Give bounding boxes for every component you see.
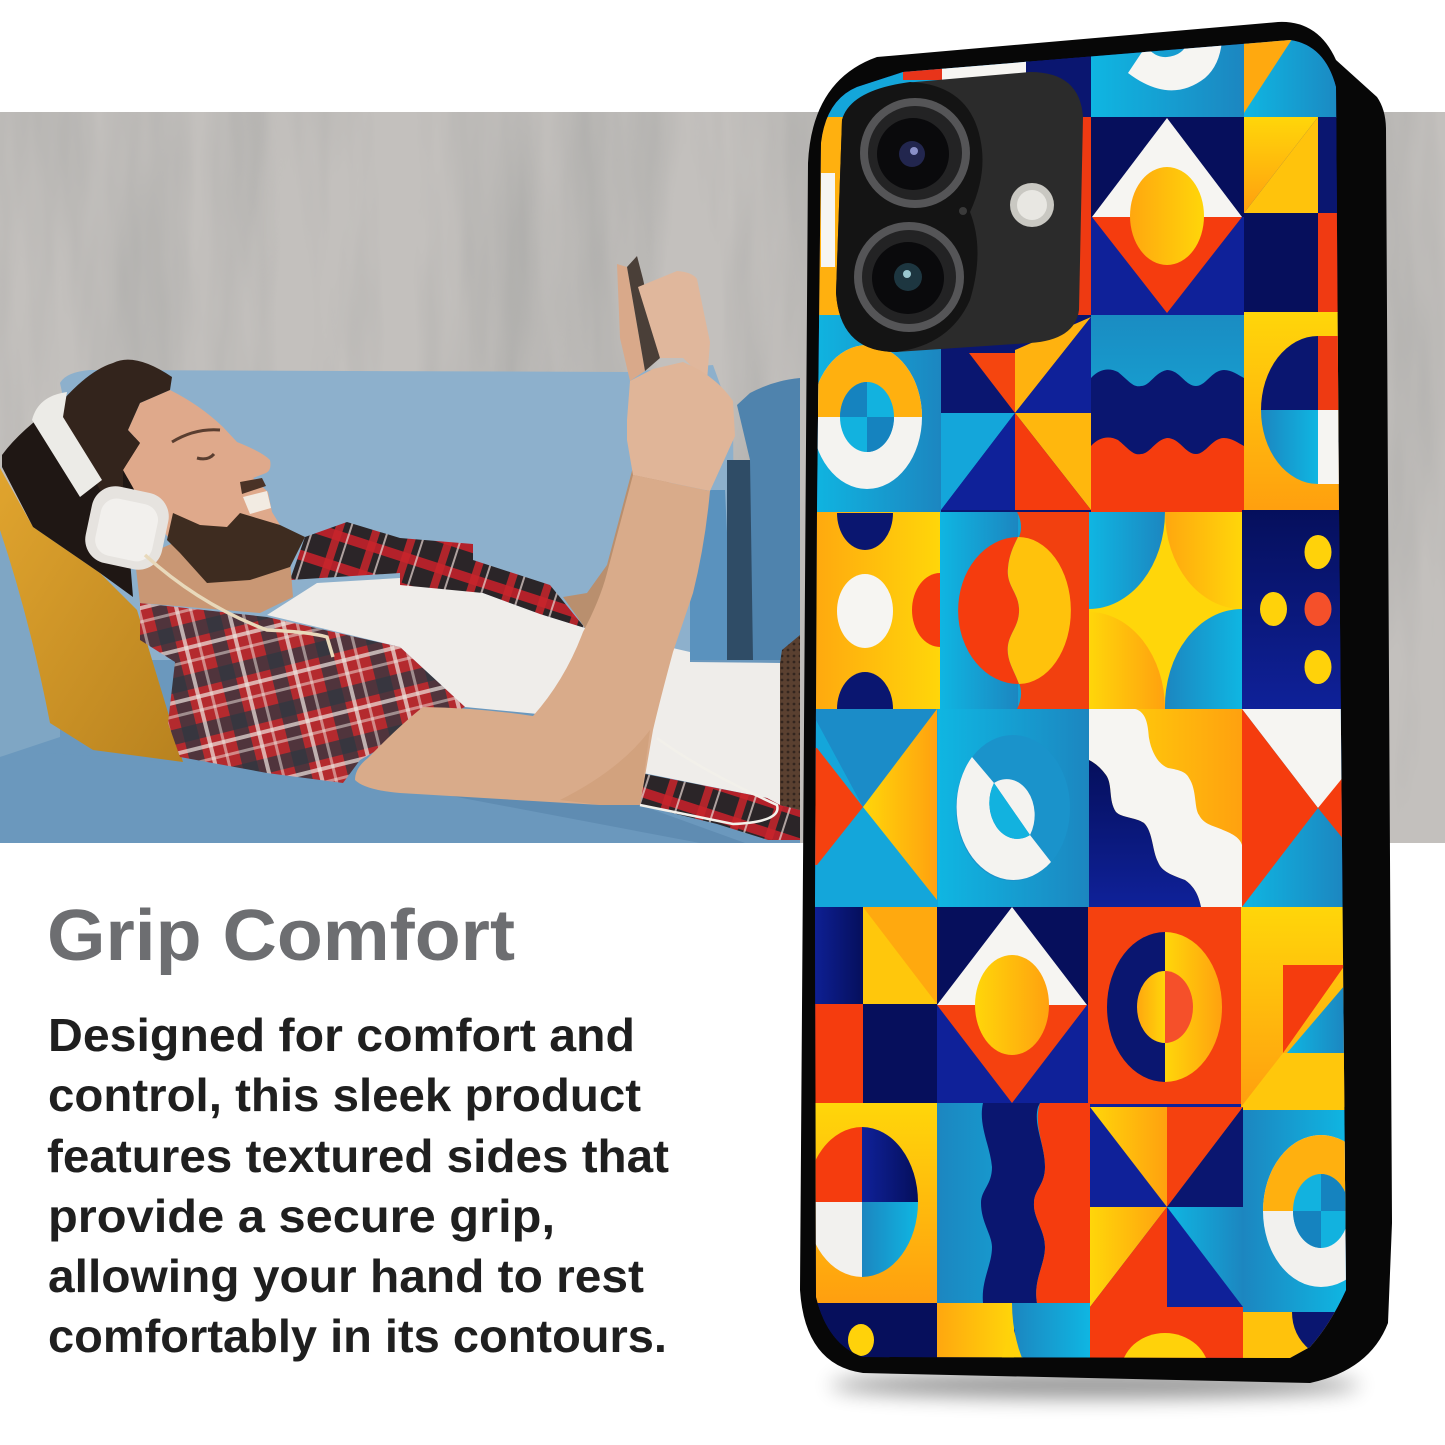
body text [47, 1009, 669, 1362]
inner elbow shadow [560, 730, 650, 805]
face [123, 390, 280, 553]
yellow pillow [0, 468, 183, 762]
body text: allowing your hand to rest [48, 1250, 644, 1302]
plaid collar [290, 522, 585, 628]
palm behind phone [617, 264, 645, 381]
body text: features textured sides that [47, 1130, 669, 1182]
microphone dot [959, 207, 967, 215]
plaid shirt body [140, 603, 465, 783]
flash [1010, 183, 1054, 227]
background photo band [0, 112, 1445, 843]
body text: Designed for comfort and [48, 1009, 635, 1061]
body text: provide a secure grip, [48, 1190, 555, 1242]
hair top [63, 360, 172, 495]
row 3 tiles [810, 312, 1344, 512]
row 2 tiles [810, 117, 1343, 320]
printed geometric pattern [815, 40, 1346, 1358]
dark hair behind head [2, 400, 140, 597]
phone case [800, 22, 1392, 1383]
white t-shirt [267, 578, 780, 805]
row 8 tiles [818, 1303, 1335, 1358]
eye and brow [172, 430, 220, 459]
back forearm [563, 467, 670, 628]
heading: Grip Comfort [47, 896, 515, 976]
man lying on sofa [2, 256, 800, 840]
row 1 tiles [826, 40, 1336, 120]
lens: upper [860, 98, 970, 208]
headphone cable [145, 555, 333, 657]
jeans [780, 635, 800, 810]
beard [167, 513, 305, 583]
earphone cable by wrist [640, 738, 777, 824]
concrete wall [0, 112, 1445, 843]
handset [627, 256, 660, 371]
phone case drop shadow [830, 1372, 1360, 1398]
lower plaid shirt tail [640, 773, 800, 840]
headphone ear cup [81, 482, 173, 574]
body text: comfortably in its contours. [48, 1310, 667, 1362]
neck [135, 540, 293, 613]
dark lens surround [836, 82, 982, 352]
row 7 tiles [806, 1103, 1379, 1312]
forearm and upper arm [355, 475, 710, 805]
row 6 tiles [810, 907, 1345, 1110]
headphone band [32, 392, 102, 497]
fist [627, 362, 735, 491]
camera module [836, 72, 1083, 352]
mouth and moustache [240, 478, 271, 514]
body text: control, this sleek product [48, 1069, 641, 1121]
row 4 tiles [810, 510, 1344, 709]
blue sofa [0, 365, 800, 843]
lens: lower [854, 222, 964, 332]
row 5 tiles [810, 709, 1344, 907]
fingers [638, 271, 710, 381]
